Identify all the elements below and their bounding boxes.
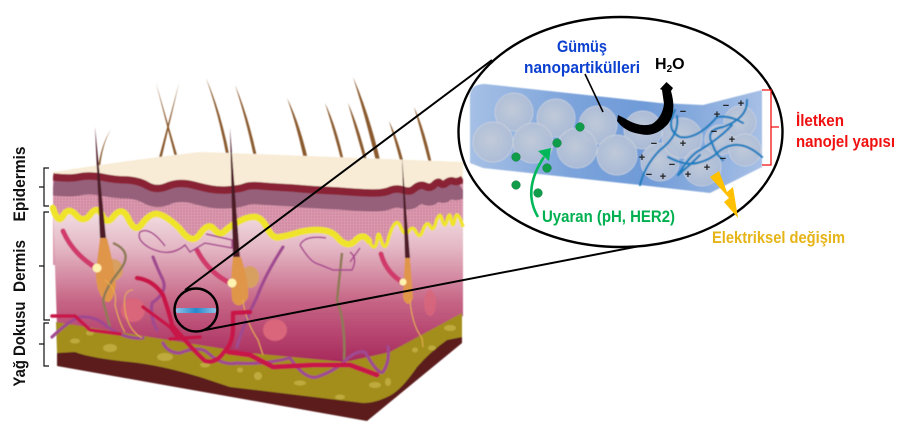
hair strands above skin — [98, 77, 433, 183]
cream stratum surface — [53, 152, 463, 205]
charges — [639, 98, 744, 183]
charges: − — [651, 138, 657, 150]
fat highlights — [70, 325, 456, 400]
label: H2O: O — [672, 56, 685, 73]
hair follicles — [96, 238, 413, 306]
follicle bulbs — [92, 264, 406, 288]
charges: + — [738, 98, 744, 110]
pink glands — [121, 290, 436, 341]
purple squiggles — [139, 231, 360, 270]
label: Gümüş nanopartikülleri: nanopartikülleri — [524, 59, 640, 77]
magnified ellipse — [458, 17, 782, 247]
charges: + — [639, 152, 645, 164]
zoom lines — [185, 60, 645, 330]
label: Dermis: Dermis — [10, 240, 29, 292]
yellow wavy junction — [53, 208, 369, 244]
dark hair shafts — [95, 127, 410, 258]
charges: + — [660, 171, 666, 183]
green arrow — [531, 148, 551, 217]
pointer line — [585, 74, 603, 112]
label: H2O: H — [655, 56, 667, 73]
charges: − — [720, 153, 726, 165]
silver nanoparticles — [473, 93, 761, 186]
red vessels — [52, 278, 377, 375]
left layer brackets — [39, 168, 50, 366]
gel slab — [470, 84, 762, 193]
subcutaneous base — [57, 330, 462, 421]
label: H2O: 2 — [667, 64, 673, 75]
charges: − — [723, 100, 729, 112]
small sample circle — [174, 288, 218, 332]
charges: − — [669, 159, 675, 171]
red bracket — [762, 90, 779, 165]
skin cross-section block — [52, 77, 463, 421]
fat layer — [56, 313, 462, 403]
label: Gümüş nanopartikülleri: Gümüş — [557, 38, 607, 56]
lightning bolt — [710, 171, 738, 218]
dark red stratum band — [53, 176, 463, 193]
charges: + — [704, 162, 710, 174]
charges: + — [729, 134, 735, 146]
green stimulus dots — [512, 123, 584, 197]
tan follicle glands — [103, 259, 259, 288]
charges: − — [646, 169, 652, 181]
label: Elektriksel değişim: Elektriksel değişim — [712, 229, 845, 247]
charges: + — [680, 138, 686, 150]
label: Epidermis: Epidermis — [10, 146, 29, 222]
polymer strands — [640, 100, 762, 185]
label: İletken nanojel yapısı: nanojel yapısı — [796, 133, 895, 151]
pink sebaceous bands — [63, 231, 402, 283]
label: İletken nanojel yapısı: İletken — [796, 112, 844, 130]
label: Yağ Dokusu: Yağ Dokusu — [10, 302, 29, 386]
charges: + — [685, 169, 691, 181]
purple vessels — [52, 247, 388, 377]
stippled pink epidermis layer — [53, 176, 463, 265]
mauve layer — [53, 176, 463, 204]
charges: − — [711, 126, 717, 138]
yellow wavy junction right — [369, 215, 463, 247]
fine yellow nerves — [105, 280, 423, 355]
label: Uyaran: Uyaran (pH, HER2) — [542, 208, 675, 226]
nanogel panel — [470, 84, 762, 193]
charges: − — [680, 106, 686, 118]
olive nerves — [103, 243, 344, 360]
black water arrow — [617, 82, 673, 135]
charges: + — [714, 109, 720, 121]
dermis gradient — [53, 208, 463, 365]
